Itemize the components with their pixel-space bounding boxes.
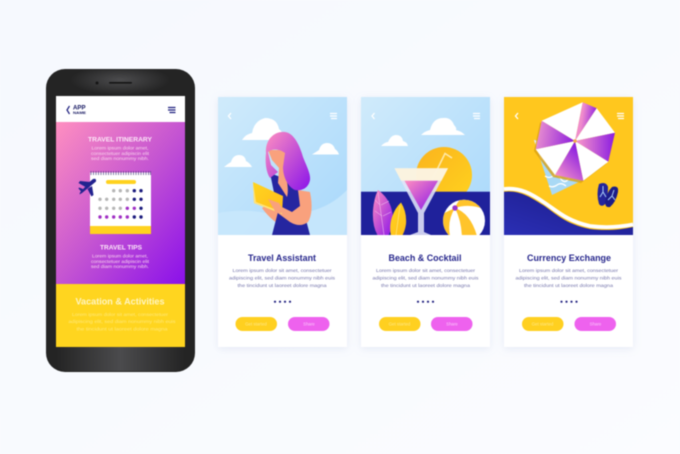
text block (516, 268, 622, 289)
camera and speaker (96, 82, 132, 84)
leaf: pink (373, 190, 393, 236)
text block: itinerary description: sed diam nonummy nibh. (91, 156, 149, 161)
tablet (253, 182, 285, 214)
straw (436, 152, 453, 169)
heading: Travel Assistant (248, 253, 317, 264)
text block: itinerary description: Lorem ipsum dolor amet, (92, 146, 148, 150)
pagination dots (274, 301, 291, 303)
icon: back and menu (372, 113, 480, 119)
text block: Lorem ipsum dolor sit amet, consectetuer (376, 268, 475, 274)
button: get started (379, 317, 420, 331)
text block: adipiscing elit, sed diam nonummy nibh euis (516, 276, 622, 282)
button: get started (236, 317, 277, 331)
button: get started (522, 317, 564, 331)
text block: adipiscing elit, sed diam nonummy nibh euis (372, 276, 479, 282)
sun (416, 146, 473, 192)
panel: vacation and activities: adipiscing elit, sed diam nonummy nibh euis (68, 319, 176, 324)
button: get started: Get started (532, 322, 554, 326)
icon: back and menu (516, 113, 624, 119)
button: share (288, 317, 330, 331)
text block: the tincidunt ut laoreet dolore magna (381, 283, 470, 289)
icon: calendar (90, 171, 151, 234)
icon: clouds (224, 118, 339, 167)
panel: phone mockup (46, 69, 195, 372)
icon: flip flops (598, 183, 618, 207)
heading: Beach & Cocktail (388, 253, 462, 264)
app header: APP (73, 106, 86, 112)
text block: tips description: Lorem ipsum dolor amet, (92, 254, 148, 258)
icon: airplane (78, 179, 96, 196)
button: share (431, 317, 472, 331)
sea (361, 192, 490, 236)
person (262, 132, 312, 235)
app header: NAME (73, 111, 87, 115)
cocktail glass (394, 168, 448, 235)
beach ball (442, 198, 486, 236)
text block: tips description: sed diam nonummy nibh. (91, 264, 149, 269)
text block: the tincidunt ut laoreet dolore magna (524, 283, 613, 289)
button: share: Share (590, 322, 602, 326)
panel: vacation and activities: the tincidunt ut laoreet dolore magna (76, 326, 168, 332)
icon: back and menu (228, 113, 337, 119)
heading: travel itinerary: TRAVEL ITINERARY (88, 136, 153, 144)
gradient panel (56, 122, 185, 284)
button: share: Share (446, 322, 458, 326)
panel: vacation and activities (56, 284, 185, 347)
illustration: cocktail on the beach (361, 97, 490, 242)
text block: Lorem ipsum dolor sit amet, consectetuer (519, 268, 618, 274)
button: get started: Get started (389, 322, 411, 326)
umbrella (534, 102, 615, 183)
text block: itinerary description (91, 146, 150, 161)
panel: currency exchange card (504, 97, 633, 347)
text block: tips description: consectetuer adipiscin elit (91, 259, 150, 264)
leaf: yellow (390, 202, 406, 236)
top bezel highlight (60, 70, 180, 96)
pagination dots (560, 301, 578, 303)
text block: the tincidunt ut laoreet dolore magna (238, 283, 327, 289)
text block: Lorem ipsum dolor sit amet, consectetuer (232, 268, 332, 274)
pagination dots (417, 301, 434, 303)
text block: tips description (91, 254, 150, 269)
text block: adipiscing elit, sed diam nonummy nibh euis (229, 276, 336, 282)
towel (534, 140, 583, 195)
icon: clouds (381, 118, 465, 146)
text block: itinerary description: consectetuer adipiscin elit (91, 151, 150, 156)
illustration: woman with tablet (218, 97, 347, 235)
panel: vacation and activities: Vacation & Activities (76, 296, 165, 306)
app header (56, 96, 185, 122)
text block (372, 268, 479, 289)
heading: travel tips: TRAVEL TIPS (100, 244, 143, 252)
panel: beach and cocktail card (361, 97, 490, 347)
button: get started: Get started (245, 322, 267, 326)
button: share: Share (303, 322, 315, 326)
button: share (574, 317, 616, 331)
panel: travel assistant card (218, 97, 347, 347)
illustration: umbrella on the beach (504, 97, 633, 235)
heading: Currency Exchange (527, 253, 611, 264)
sand wave (504, 191, 633, 235)
bottom bezel highlight (56, 347, 185, 371)
phone body (46, 69, 195, 372)
panel: vacation and activities: Lorem ipsum dolor sit amet, consectetuer (72, 312, 169, 317)
text block (229, 268, 336, 289)
